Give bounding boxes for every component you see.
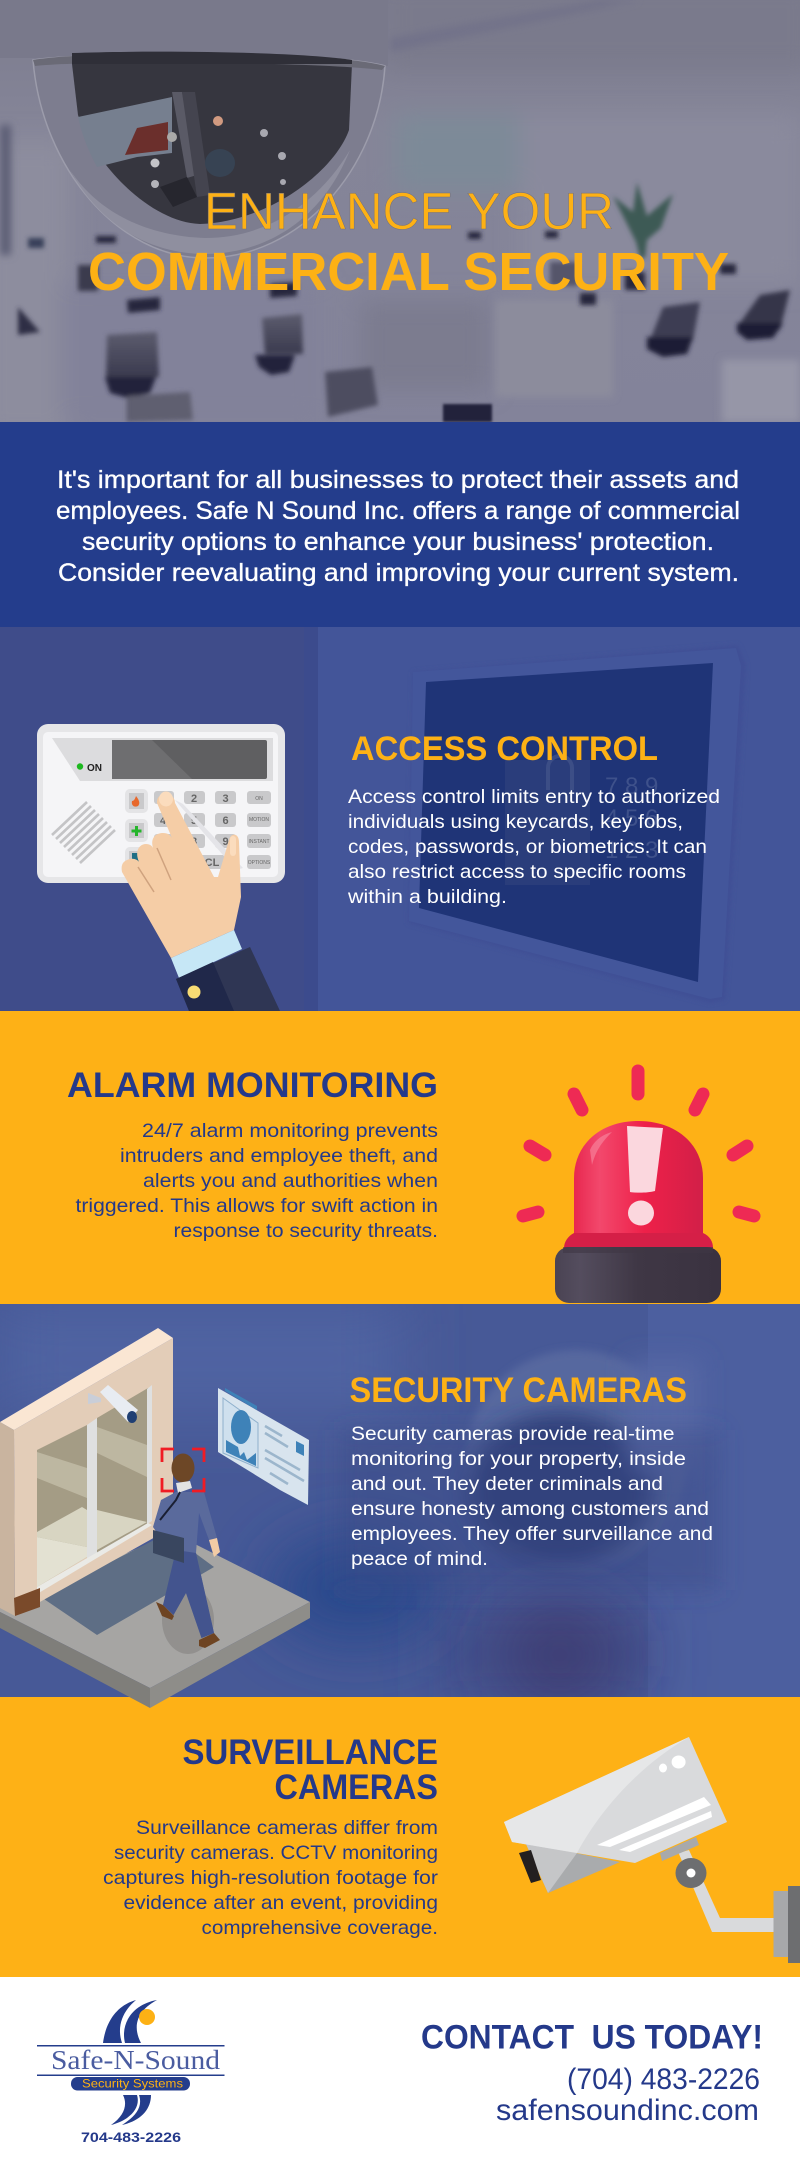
icon: alarm keypad: 6 (222, 815, 229, 827)
intro text: security options to enhance your business' protection. (82, 528, 714, 556)
access control text: Access control limits entry to authorized (348, 786, 720, 808)
security cameras text: ensure honesty among customers and (351, 1498, 709, 1520)
intro text: Consider reevaluating and improving your current system. (58, 559, 739, 587)
logo: Safe-N-Sound (51, 2045, 221, 2075)
right glass pane (97, 1388, 148, 1553)
inner dark lens (72, 64, 352, 224)
alarm monitoring text: response to security threats. (174, 1220, 438, 1242)
surveillance cameras text: security cameras. CCTV monitoring (114, 1842, 438, 1864)
hero banner: blurred office with dome camera (0, 0, 800, 440)
icon: door camera (88, 1385, 138, 1423)
panel: access control (0, 627, 800, 1011)
icon: alarm keypad (37, 724, 285, 883)
surveillance cameras heading: SURVEILLANCE (182, 1733, 438, 1772)
icon: alarm keypad: 8 (191, 836, 197, 848)
siren base (555, 1247, 721, 1303)
surveillance cameras text: Surveillance cameras differ from (136, 1817, 438, 1839)
panel: footer (0, 1977, 800, 2159)
keypad keys (125, 789, 271, 871)
siren dome (574, 1121, 703, 1245)
phone number: (704) 483-2226 (567, 2063, 760, 2096)
contact heading: CONTACT US TODAY! (421, 2018, 763, 2056)
logo lower swoosh (111, 2095, 138, 2125)
access control heading: ACCESS CONTROL (351, 730, 658, 768)
icon: alarm keypad: 3 (222, 793, 229, 805)
surveillance cameras text: captures high-resolution footage for (103, 1867, 439, 1889)
access control text (347, 786, 720, 908)
intro text: employees. Safe N Sound Inc. offers a range of commercial (56, 497, 740, 525)
icon: alarm keypad: 2 (191, 793, 197, 805)
surveillance cameras text (103, 1817, 439, 1939)
icon: alarm keypad: 5 (191, 815, 197, 827)
dome rim (33, 56, 385, 70)
icon: hand pressing key (122, 792, 280, 1011)
security cameras text: employees. They offer surveillance and (351, 1523, 713, 1545)
surveillance cameras text: comprehensive coverage. (202, 1917, 438, 1939)
icon: alarm keypad: ON (87, 763, 102, 774)
face recognition card (218, 1388, 309, 1505)
icon: alarm keypad: ON (255, 796, 263, 802)
logo upper swoosh (103, 2000, 136, 2043)
alarm monitoring text: 24/7 alarm monitoring prevents (142, 1120, 438, 1142)
title (88, 183, 729, 302)
door frame (0, 1328, 173, 1616)
access control text: codes, passwords, or biometrics. It can (348, 836, 707, 858)
dome lower mottled reflection (70, 150, 350, 254)
surveillance cameras text: evidence after an event, providing (124, 1892, 438, 1914)
background tablet: 4 5 6 (605, 805, 658, 832)
panel: security cameras (0, 1304, 800, 1705)
speaker grille (52, 802, 115, 863)
alarm monitoring text: intruders and employee theft, and (120, 1145, 438, 1167)
door mat (41, 1533, 214, 1635)
icon: bullet cctv camera (504, 1737, 800, 1963)
logo (37, 2000, 224, 2145)
security cameras text: and out. They deter criminals and (351, 1473, 663, 1495)
panel: surveillance cameras (0, 1697, 800, 1977)
man walking (153, 1454, 220, 1654)
panel: alarm monitoring (0, 1011, 800, 1304)
alarm monitoring text: triggered. This allows for swift action in (76, 1195, 438, 1217)
surveillance cameras heading (182, 1733, 438, 1807)
alarm monitoring heading: ALARM MONITORING (67, 1066, 438, 1105)
website: safensoundinc.com (496, 2094, 759, 2127)
title line 2: COMMERCIAL SECURITY (88, 242, 729, 302)
alarm monitoring text (76, 1120, 438, 1242)
illustration: isometric entrance with man (0, 1328, 310, 1708)
chairs and monitors (106, 332, 159, 377)
access control text: within a building. (347, 886, 507, 908)
icon: alarm keypad: OPTIONS (248, 860, 271, 866)
access control text: also restrict access to specific rooms (348, 861, 686, 883)
security cameras text (351, 1423, 713, 1570)
lens reflections (78, 97, 172, 167)
icon: alarm keypad: INSTANT (248, 839, 270, 845)
logo: Security Systems (82, 2076, 183, 2090)
background tablet: 1 2 3 (605, 837, 658, 864)
background tablet: 7 8 9 (605, 773, 658, 800)
icon: alarm keypad: 4 (160, 815, 167, 827)
icon: alarm keypad: 9 (222, 836, 229, 848)
logo: 704-483-2226 (81, 2130, 182, 2145)
floor slab (0, 1533, 310, 1708)
icon: alarm keypad: NCL (197, 857, 220, 869)
security cameras text: monitoring for your property, inside (351, 1448, 686, 1470)
dome glass (33, 54, 385, 258)
background camera (267, 1350, 700, 1705)
security cameras text: Security cameras provide real-time (351, 1423, 674, 1445)
security cameras text: peace of mind. (351, 1548, 488, 1570)
door posts (87, 1418, 97, 1559)
red face detection brackets (162, 1449, 204, 1491)
alarm monitoring text: alerts you and authorities when (143, 1170, 438, 1192)
left glass pane (37, 1425, 87, 1587)
camera housing (0, 0, 388, 66)
panel: intro (0, 422, 800, 627)
title line 1: ENHANCE YOUR (204, 183, 614, 241)
access control text: individuals using keycards, key fobs, (348, 811, 683, 833)
icon: alarm keypad: MOTION (249, 817, 269, 823)
icon: red alarm siren (523, 1071, 754, 1303)
intro text (56, 466, 740, 587)
surveillance cameras heading: CAMERAS (274, 1768, 438, 1807)
exclamation mark (627, 1126, 663, 1193)
light rays (523, 1071, 754, 1216)
background tablet (419, 663, 713, 982)
plant (613, 182, 673, 258)
intro text: It's important for all businesses to protect their assets and (57, 466, 739, 494)
security cameras heading: SECURITY CAMERAS (350, 1371, 687, 1410)
